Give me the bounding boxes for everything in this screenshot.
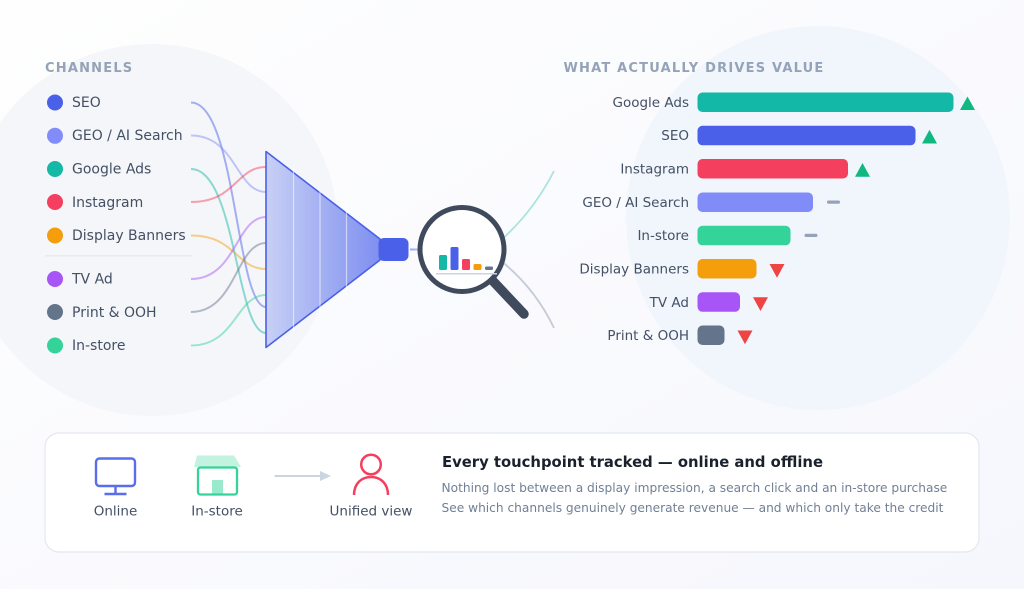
- bar chart: In-store: [637, 228, 689, 244]
- bar chart: SEO: [661, 128, 689, 144]
- icon: magnifier with mini bar chart: [420, 208, 524, 314]
- funnel: [266, 152, 408, 348]
- panel: what actually drives value: [564, 61, 975, 345]
- card text: See which channels genuinely generate revenue — and which only take the credit: [442, 501, 944, 515]
- bar chart: Print & OOH: [607, 328, 689, 344]
- bar chart: [579, 92, 954, 345]
- card heading: Every touchpoint tracked — online and offline: [442, 454, 823, 471]
- panel: bottom card: [45, 433, 979, 552]
- channel list: GEO / AI Search: [72, 128, 183, 144]
- heading: channels: CHANNELS: [45, 61, 133, 76]
- card text: [442, 481, 947, 515]
- channel list: Instagram: [72, 195, 143, 211]
- channel list: Google Ads: [72, 162, 151, 178]
- icon: store: [194, 456, 241, 494]
- icon: person: [354, 455, 388, 495]
- bar chart: GEO / AI Search: [582, 195, 689, 211]
- bar chart: Google Ads: [612, 95, 689, 111]
- flow lines into funnel: [191, 102, 266, 346]
- label: in-store: In-store: [191, 504, 243, 520]
- connector to magnifier: [410, 248, 440, 250]
- bar chart: Display Banners: [579, 262, 689, 278]
- label: online: Online: [94, 504, 137, 520]
- funnel neck: [378, 238, 408, 261]
- panel: channels: [45, 61, 192, 354]
- channel list: In-store: [72, 338, 125, 354]
- icon: monitor: [96, 458, 135, 494]
- channel list: SEO: [72, 95, 101, 111]
- arrow: [274, 471, 331, 481]
- channel list: [45, 94, 192, 354]
- channel list: Display Banners: [72, 228, 186, 244]
- channel list: Print & OOH: [72, 305, 157, 321]
- channel list: TV Ad: [71, 272, 113, 288]
- card text: Nothing lost between a display impression, a search click and an in-store purchase: [442, 481, 947, 495]
- output curves: [500, 171, 554, 328]
- label: unified view: Unified view: [330, 504, 412, 520]
- heading: value: WHAT ACTUALLY DRIVES VALUE: [564, 61, 824, 76]
- trend indicators: [738, 96, 975, 344]
- bar chart: TV Ad: [649, 295, 689, 311]
- bar chart: Instagram: [620, 162, 689, 178]
